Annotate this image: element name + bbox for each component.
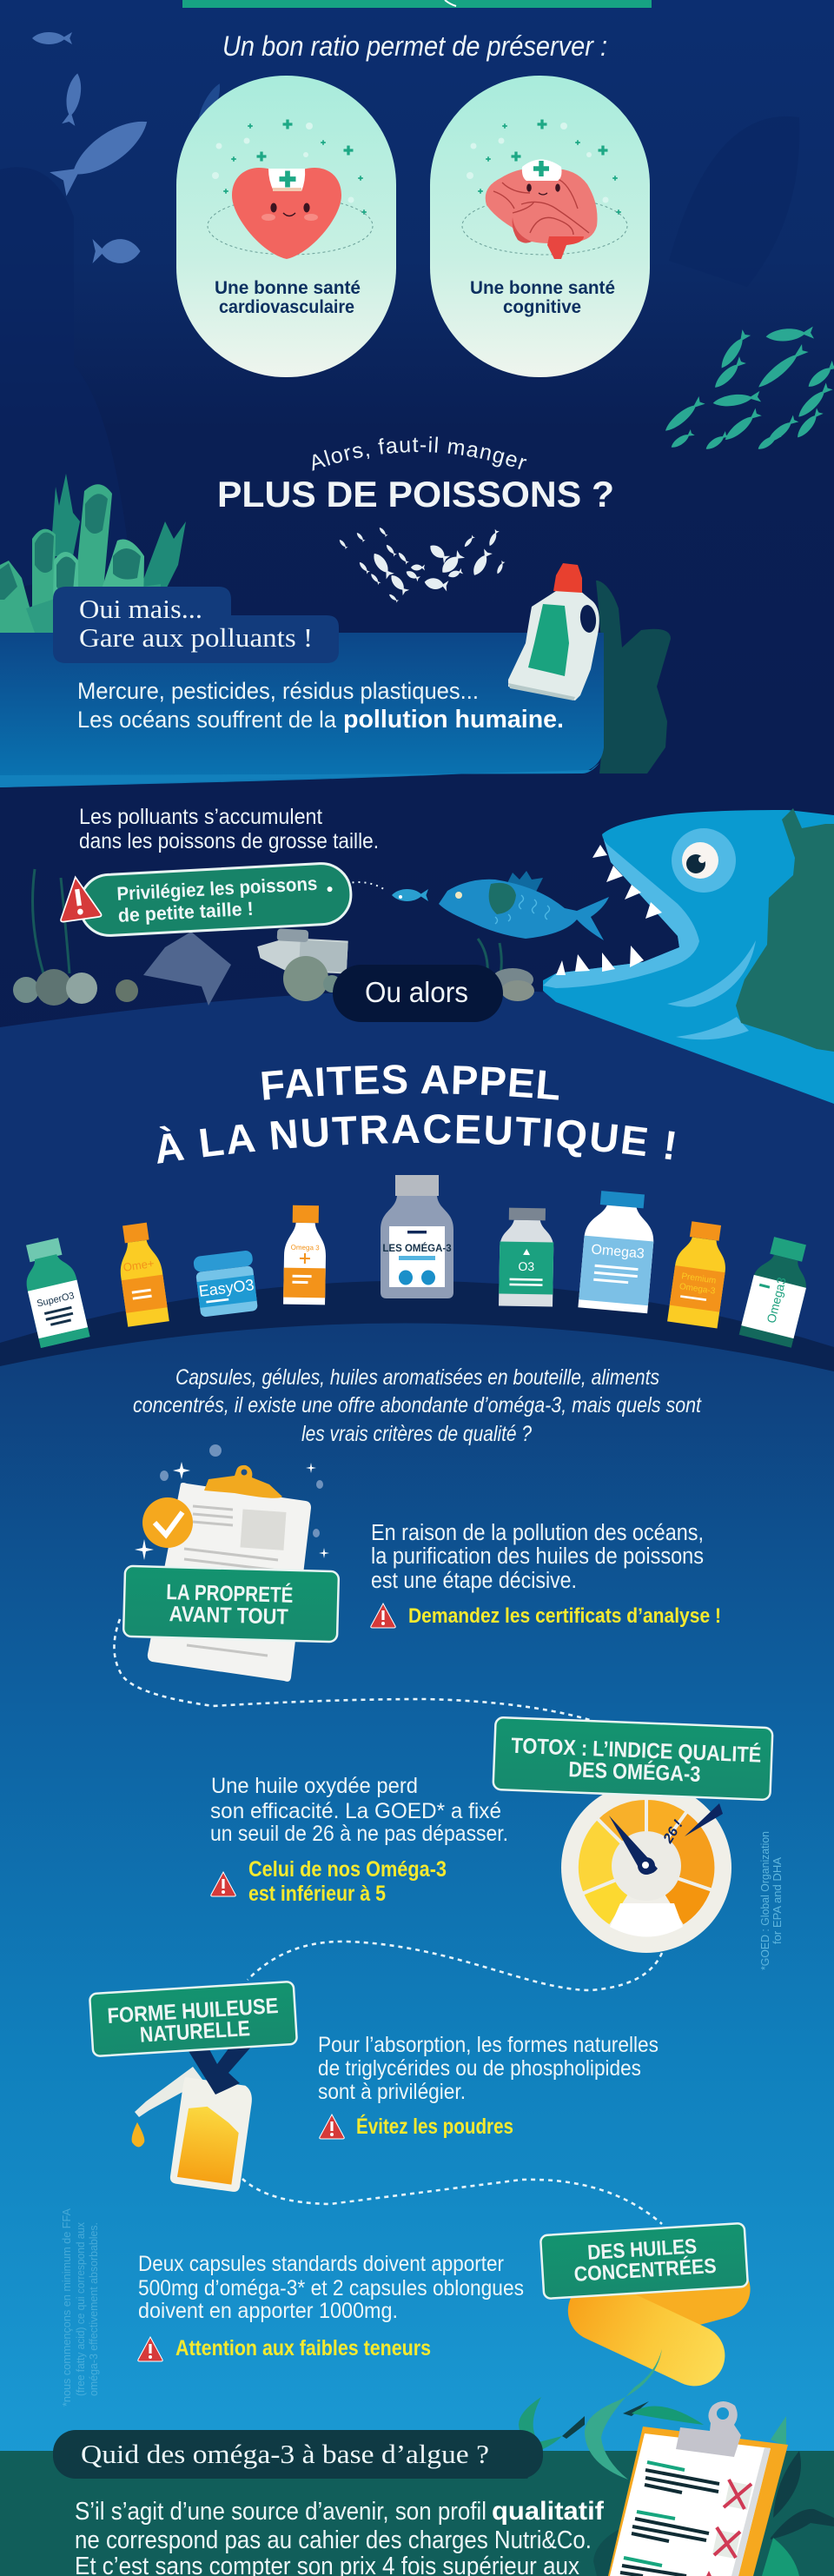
callout: small fish advice — [55, 862, 353, 937]
pill: ou alors — [333, 965, 503, 1022]
sign: la propreté — [123, 1566, 339, 1642]
big predator fish — [543, 808, 834, 1104]
sign: totox: DES OMÉGA-3 — [568, 1756, 701, 1787]
label: cardiovascular: Une bonne santé — [215, 278, 361, 298]
warning: certificates: Demandez les certificats d’analyse ! — [408, 1604, 721, 1628]
bottle: Omega+: Omega 3 — [291, 1244, 320, 1251]
text: pollutants accumulate: Les polluants s’accumulent — [79, 805, 322, 829]
sign: forme huileuse: NATURELLE — [139, 2016, 251, 2048]
top green bar — [182, 0, 652, 8]
teeth — [556, 845, 662, 975]
heading: nutraceutique: À LA NUTRACEUTIQUE ! — [157, 1114, 675, 1164]
label: cardiovascular — [215, 278, 361, 317]
icon: detergent bottle — [508, 563, 599, 700]
health crosses, right — [467, 120, 621, 215]
sign: totox: TOTOX : L’INDICE QUALITÉ — [511, 1733, 762, 1768]
dashed orbit, left — [208, 197, 373, 255]
bottle: yellow — [114, 1221, 169, 1327]
pill: quid algae — [53, 2430, 543, 2479]
panel: cardiovascular health — [176, 76, 396, 377]
label: cognitive: Une bonne santé — [470, 278, 615, 298]
panel: pollution — [0, 587, 604, 787]
text: pollutants accumulate — [79, 805, 379, 853]
sign: la propreté: LA PROPRETÉ — [166, 1579, 294, 1608]
heading: curved question: Alors, faut-il manger — [313, 436, 526, 471]
icon: warning — [55, 874, 102, 922]
text: absorption: sont à privilégier. — [318, 2080, 466, 2104]
intro paragraph: les vrais critères de qualité ? — [301, 1422, 532, 1446]
sign: huiles concentrées: CONCENTRÉES — [573, 2254, 717, 2287]
text: purification: est une étape décisive. — [371, 1569, 577, 1593]
bottle: Omega3: Omega3 — [591, 1242, 645, 1262]
sign: forme huileuse — [89, 1982, 297, 2056]
bottle: les oméga-3 — [381, 1175, 453, 1298]
warning: below 5: est inférieur à 5 — [248, 1882, 386, 1906]
text: pollutants list — [77, 678, 564, 734]
product bottles — [17, 1175, 817, 1348]
icon: totox gauge — [561, 1783, 731, 1953]
icon: clipboard with crosses — [608, 2401, 788, 2576]
teal fish school — [662, 327, 834, 452]
dotted line to small fish — [334, 882, 387, 891]
bottle: Ome3 — [739, 1234, 817, 1348]
callout: small fish advice: Privilégiez les poissons — [116, 873, 318, 905]
bottle: Omega+ — [283, 1205, 327, 1305]
rocks left — [13, 969, 138, 1006]
warning: below 5 — [211, 1857, 447, 1906]
warning: powders — [320, 2114, 513, 2139]
footnote: FFA: oméga-3 effectivement absorbables. — [88, 2222, 100, 2396]
bottle: EasyO3 — [193, 1250, 259, 1318]
text: pollutants list: pollution humaine. — [343, 706, 564, 734]
text: oxidised oil — [210, 1774, 508, 1846]
algae leaves — [513, 2349, 834, 2576]
icon: dropper bottle — [132, 2036, 254, 2193]
icon: oil capsules — [558, 2254, 757, 2396]
bottle: SuperO3 — [17, 1236, 90, 1348]
heading: plus de poissons: PLUS DE POISSONS ? — [217, 474, 614, 515]
label: cardiovascular: cardiovasculaire — [219, 297, 354, 317]
label: cognitive: cognitive — [503, 297, 581, 317]
sign: huiles concentrées: DES HUILES — [586, 2234, 698, 2265]
bottle: O3 — [499, 1207, 554, 1307]
intro paragraph — [133, 1365, 702, 1446]
icon: brain nurse — [486, 160, 598, 259]
text: algae: S’il s’agit d’une source d’avenir, son profil — [75, 2498, 486, 2526]
text: oxidised oil: Une huile oxydée perd — [211, 1774, 418, 1798]
callout box: oui mais — [53, 587, 339, 663]
text: oxidised oil: son efficacité. La GOED* a fixé — [210, 1799, 501, 1823]
panel: cognitive health — [430, 76, 650, 377]
sign: totox — [493, 1717, 772, 1800]
kelp behind panel — [596, 581, 671, 773]
bottle: les oméga-3: LES OMÉGA-3 — [382, 1243, 452, 1254]
bottle: Omega3 — [578, 1190, 658, 1313]
bottle: Ome3: Omega3 — [764, 1276, 789, 1325]
callout box: oui mais: Gare aux polluants ! — [79, 622, 313, 653]
text: purification: la purification des huiles de poissons — [371, 1544, 704, 1569]
dashed route 2 — [248, 1942, 662, 1990]
text: oxidised oil: un seuil de 26 à ne pas dépasser. — [210, 1822, 508, 1846]
text: purification: En raison de la pollution des océans, — [371, 1521, 704, 1545]
icon: clipboard with check — [135, 1444, 329, 1682]
text: absorption — [318, 2033, 659, 2104]
warning: low content: Attention aux faibles teneurs — [175, 2336, 431, 2360]
bottle: premium: Omega-3 — [678, 1282, 716, 1297]
gill marks — [667, 940, 756, 1039]
text: capsule content: 500mg d’oméga-3* et 2 capsules oblongues — [138, 2276, 524, 2300]
plastic bag — [143, 932, 231, 1006]
text: purification — [371, 1521, 704, 1593]
dashed route 3 — [242, 2179, 662, 2224]
icon: heart nurse — [232, 168, 341, 259]
text: capsule content — [138, 2252, 524, 2323]
text: capsule content: Deux capsules standards doivent apporter — [138, 2252, 504, 2276]
bottle: EasyO3: EasyO3 — [198, 1276, 255, 1300]
callout box: oui mais: Oui mais... — [79, 594, 202, 624]
pill: quid algae: Quid des oméga-3 à base d’algue ? — [81, 2439, 489, 2469]
bottle: yellow: Ome+ — [122, 1257, 155, 1274]
bottle: premium: Premium — [681, 1271, 717, 1286]
warning: below 5: Celui de nos Oméga-3 — [248, 1857, 447, 1882]
heading: nutraceutique: FAITES APPEL — [261, 1065, 559, 1100]
plastic bottle — [256, 927, 348, 974]
text: absorption: de triglycérides ou de phospholipides — [318, 2056, 641, 2081]
label: cognitive — [470, 278, 615, 317]
footnote: FFA: *nous commençons en minimum de FFA — [61, 2208, 73, 2407]
warning: powders: Évitez les poudres — [356, 2114, 513, 2139]
footnote: GOED — [758, 1831, 784, 1970]
bottle: O3: O3 — [518, 1259, 535, 1273]
intro heading: Un bon ratio permet de préserver : — [222, 30, 607, 62]
text: algae: ne correspond pas au cahier des charges Nutri&Co. — [75, 2526, 592, 2554]
health crosses, left — [212, 120, 367, 215]
body patch — [736, 808, 834, 1052]
seabed litter — [13, 869, 534, 1006]
text: algae — [75, 2497, 605, 2576]
white fish cluster — [338, 527, 505, 603]
text: algae: qualitatif — [492, 2497, 605, 2526]
icon: totox gauge: 26 ! — [660, 1817, 686, 1847]
eye — [672, 828, 736, 893]
sign: forme huileuse: FORME HUILEUSE — [107, 1994, 279, 2028]
intro paragraph: Capsules, gélules, huiles aromatisées en bouteille, aliments — [175, 1365, 659, 1390]
dashed orbit, right — [462, 197, 627, 255]
small fish — [392, 889, 428, 901]
footnote: FFA: (free fatty acid) ce qui correspond aux — [75, 2221, 87, 2396]
background fish silhouettes — [32, 32, 225, 263]
footnote: GOED: for EPA and DHA — [771, 1857, 784, 1944]
text: pollutants list: Les océans souffrent de la — [77, 707, 337, 733]
sign: la propreté: AVANT TOUT — [169, 1602, 288, 1630]
footnote: FFA — [61, 2208, 100, 2407]
heading: nutraceutique — [157, 1065, 675, 1164]
text: capsule content: doivent en apporter 1000mg. — [138, 2299, 398, 2323]
algae section background — [0, 2451, 834, 2576]
text: pollutants list: Mercure, pesticides, résidus plastiques... — [77, 678, 479, 704]
rocks centre — [283, 956, 534, 1001]
callout: small fish advice: de petite taille ! — [117, 898, 254, 926]
text: absorption: Pour l’absorption, les formes naturelles — [318, 2033, 659, 2057]
bottle: premium — [667, 1220, 731, 1328]
dashed route 1 — [114, 1619, 606, 1725]
footnote: GOED: *GOED : Global Organization — [758, 1831, 771, 1970]
medium fish — [439, 871, 609, 940]
sign: huiles concentrées — [540, 2223, 748, 2299]
bottle: SuperO3: SuperO3 — [36, 1291, 76, 1310]
intro paragraph: concentrés, il existe une offre abondante d’oméga-3, mais quels sont — [133, 1393, 702, 1417]
pill: ou alors: Ou alors — [365, 976, 468, 1008]
coral — [0, 474, 186, 633]
text: pollutants accumulate: dans les poissons de grosse taille. — [79, 829, 379, 853]
